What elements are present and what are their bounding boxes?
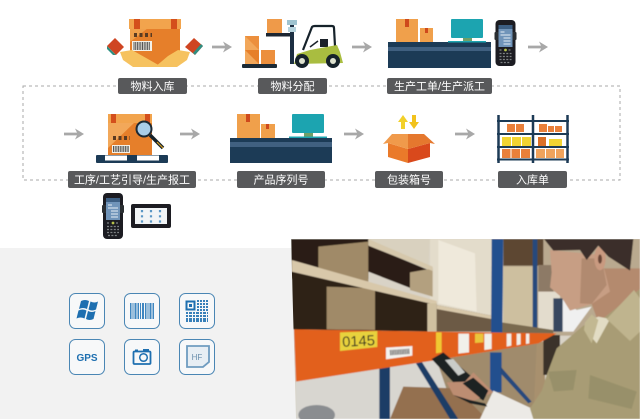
icon: HF card: HF: [192, 353, 202, 362]
shelf label 0145: [340, 331, 377, 351]
arrow: [352, 42, 372, 52]
label: 物料分配: 物料分配: [270, 79, 314, 93]
icon: GPS: GPS: [76, 353, 98, 364]
icon: GPS: [70, 340, 104, 374]
cartons on shelf: [375, 240, 426, 263]
man face: [550, 250, 610, 311]
icon: storage shelves: [497, 115, 569, 163]
dashed flow connector: [23, 86, 620, 180]
icon: barcode: [124, 294, 160, 328]
lower floor: [296, 361, 444, 418]
icon: rugged tablet: [131, 204, 171, 228]
icon: handheld scanner: [494, 20, 516, 66]
panel: grey feature icons background: [0, 248, 296, 419]
icon: handheld scanner: [102, 193, 124, 239]
photo: worker scanning warehouse shelf: [290, 235, 640, 419]
step 7: warehouse receipt: [497, 115, 569, 188]
icon: forklift with boxes: [242, 19, 343, 68]
label: 包装箱号: 包装箱号: [387, 172, 431, 186]
icon: open box with arrows: [383, 115, 435, 163]
arrow: [344, 128, 364, 140]
scanner device and hand: [432, 352, 488, 401]
step 3: production work order: [387, 19, 516, 94]
background warehouse: [503, 239, 640, 336]
man sleeve: [480, 391, 540, 419]
step 4: process guidance and reporting: [68, 114, 196, 239]
label: 生产工单/生产派工: 生产工单/生产派工: [394, 79, 485, 93]
icon: workbench with boxes and monitor: [388, 19, 491, 68]
feature icon grid: [70, 294, 214, 374]
arrow: [528, 42, 548, 52]
step 6: packing box number: [375, 115, 443, 188]
label: 产品序列号: 产品序列号: [254, 172, 308, 186]
icon: box held in hands: [107, 19, 203, 67]
arrow: [212, 42, 232, 52]
man shirt: [533, 289, 640, 419]
icon: HF card: [180, 340, 214, 374]
arrow: [64, 128, 84, 140]
step 2: material allocation: [242, 19, 343, 94]
barcode label: [386, 346, 412, 359]
photo: worker scanning warehouse shelf: 0145: [342, 333, 375, 351]
arrow: [180, 128, 200, 140]
pallets: [291, 239, 368, 279]
arrow: [455, 128, 475, 140]
label: 物料入库: 物料入库: [130, 79, 174, 93]
step 5: product serial number: [230, 114, 332, 188]
man hair: [544, 239, 633, 271]
icon: workbench with boxes and monitor: [230, 114, 332, 163]
label: 工序/工艺引导/生产报工: 工序/工艺引导/生产报工: [74, 172, 190, 186]
blue upright: [490, 239, 504, 334]
icon: inspected box on pallet: [96, 114, 168, 163]
icon: camera: [124, 340, 160, 374]
step 1: material inbound: [107, 19, 203, 94]
orange beam: [294, 329, 557, 382]
icon: QR code: [180, 294, 214, 328]
label: 入库单: 入库单: [516, 174, 549, 186]
icon: Windows: [70, 294, 104, 328]
man neck: [592, 268, 640, 322]
